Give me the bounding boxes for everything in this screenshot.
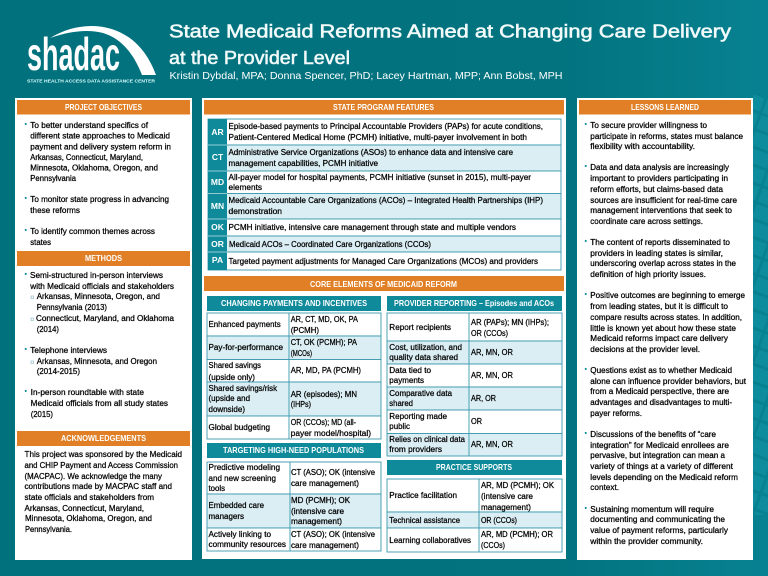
table: changing payments: (PCMH) bbox=[291, 326, 319, 335]
table: provider reporting: quality data shared bbox=[389, 353, 458, 362]
text block: methods: • bbox=[24, 272, 28, 278]
table: provider reporting: OR (CCOs) bbox=[471, 329, 508, 338]
text block: lessons: providers in leading states is similar, bbox=[590, 249, 723, 258]
text block: methods: Arkansas, Minnesota, and Oregon bbox=[37, 357, 157, 366]
table: provider reporting: AR, OR bbox=[471, 394, 496, 403]
text block: lessons: • bbox=[584, 164, 588, 170]
table: state program features: management capabilities, PCMH initiative bbox=[228, 159, 379, 168]
table: provider reporting: payments bbox=[389, 376, 424, 385]
heading: core elements: CORE ELEMENTS OF MEDICAID REFORM bbox=[310, 279, 457, 289]
table: state program features: PCMH initiative, intensive care management through state and multiple vendors bbox=[228, 223, 516, 232]
table: state program features: AR bbox=[211, 127, 224, 137]
text block: lessons: payer reforms. bbox=[590, 409, 642, 418]
heading: lessons learned: LESSONS LEARNED bbox=[631, 102, 699, 112]
text block: lessons: Questions exist as to whether Medicaid bbox=[590, 366, 732, 375]
text block: methods: • bbox=[24, 388, 28, 396]
table: targeting high-need populations: Actively linking to bbox=[208, 530, 272, 539]
text block: acknowledgements: and CHIP Payment and Access Commission bbox=[24, 461, 178, 470]
text block: lessons: underscoring overlap across states in the bbox=[590, 259, 737, 268]
table: targeting high-need populations: management) bbox=[291, 517, 342, 526]
table: provider reporting bbox=[387, 313, 562, 456]
logo: shadac: shadac bbox=[27, 28, 120, 80]
table: provider reporting: Relies on clinical data bbox=[389, 435, 466, 444]
table: changing payments: payer model/hospital) bbox=[291, 429, 371, 438]
subheading: practice supports bbox=[387, 460, 562, 475]
table: provider reporting: Comparative data bbox=[389, 389, 453, 398]
table: state program features: Patient-Centered Medical Home (PCMH) initiative, multi-payer involvement in both bbox=[228, 133, 527, 142]
text block: methods: Pennsylvania (2013) bbox=[37, 303, 107, 312]
text block: methods: Connecticut, Maryland, and Oklahoma bbox=[36, 314, 175, 323]
text block: lessons: • bbox=[584, 292, 588, 298]
text block: objectives: states bbox=[30, 238, 51, 247]
table: practice supports bbox=[387, 479, 562, 552]
text block: lessons: • bbox=[584, 506, 588, 512]
table: targeting high-need populations: MD (PCMH); OK bbox=[291, 496, 351, 505]
text block: methods: (2014-2015) bbox=[37, 367, 80, 376]
text block: lessons: value of payment reforms, particularly bbox=[590, 526, 728, 535]
text block: lessons: flexibility with accountability. bbox=[590, 142, 695, 151]
table: targeting high-need populations bbox=[207, 462, 381, 551]
text block: acknowledgements: (MACPAC). We acknowledge the many bbox=[24, 472, 162, 481]
table: changing payments: downside) bbox=[208, 405, 245, 414]
table: changing payments: (MCOs) bbox=[291, 349, 312, 358]
text block: methods: Arkansas, Minnesota, Oregon, and bbox=[37, 292, 160, 301]
text block: lessons: Sustaining momentum will require bbox=[590, 505, 715, 514]
title: at the Provider Level bbox=[169, 47, 350, 68]
text block: acknowledgements: Arkansas, Connecticut, Maryland, bbox=[24, 504, 144, 513]
text block: acknowledgements: state officials and stakeholders from bbox=[24, 493, 154, 502]
table: state program features: Administrative Service Organizations (ASOs) to enhance data and intensive care bbox=[228, 148, 514, 157]
table: changing payments: Pay-for-performance bbox=[208, 343, 284, 352]
table: state program features: PA bbox=[212, 255, 223, 265]
table: provider reporting: from providers bbox=[389, 445, 442, 454]
table: changing payments: AR, MD, PA (PCMH) bbox=[291, 366, 361, 375]
heading: methods: METHODS bbox=[85, 253, 122, 263]
text block: objectives: Minnesota, Oklahoma, Oregon, and bbox=[30, 164, 158, 172]
text block: methods: (2015) bbox=[31, 410, 53, 419]
table: provider reporting: AR (PAPs); MN (IHPs); bbox=[471, 318, 549, 327]
text block: lessons: coordinate care across settings. bbox=[590, 217, 703, 226]
subheading: provider reporting: PROVIDER REPORTING – Episodes and ACOs bbox=[394, 298, 554, 308]
table: targeting high-need populations: Predictive modeling bbox=[208, 463, 280, 472]
table: targeting high-need populations: tools bbox=[208, 484, 225, 493]
table: state program features bbox=[208, 119, 561, 270]
table: targeting high-need populations: and new screening bbox=[208, 474, 276, 483]
text block: lessons: from a Medicaid perspective, there are bbox=[590, 387, 730, 396]
table: changing payments: OR (CCOs); MD (all- bbox=[291, 418, 356, 427]
text block: lessons: context. bbox=[590, 483, 619, 492]
text block: lessons: pervasive, but integration can mean a bbox=[590, 451, 726, 460]
table: changing payments bbox=[207, 313, 381, 439]
text block: methods: In-person roundtable with state bbox=[31, 388, 145, 397]
text block: lessons: little is known yet about how these state bbox=[590, 324, 737, 333]
table: provider reporting: AR, MN, OR bbox=[471, 371, 513, 380]
heading: project objectives: PROJECT OBJECTIVES bbox=[65, 102, 142, 112]
table: changing payments: Shared savings/risk bbox=[208, 384, 278, 393]
table: targeting high-need populations: managers bbox=[208, 512, 244, 521]
heading: acknowledgements bbox=[17, 431, 190, 446]
text block: lessons: The content of reports disseminated to bbox=[590, 238, 731, 247]
header band bbox=[27, 20, 732, 84]
text block: lessons: integration” for Medicaid enrollees are bbox=[590, 441, 730, 450]
title bbox=[169, 20, 732, 68]
panel: center column bbox=[202, 98, 566, 559]
text block: objectives: different state approaches to Medicaid bbox=[30, 132, 170, 141]
table: changing payments: (upside and bbox=[208, 394, 250, 403]
table: practice supports: management) bbox=[481, 503, 531, 512]
text block: lessons: To secure provider willingness to bbox=[590, 121, 708, 130]
text block: lessons: documenting and communicating the bbox=[590, 515, 726, 524]
text block: acknowledgements: contributions made by MACPAC staff and bbox=[24, 482, 172, 491]
table: targeting high-need populations: community resources bbox=[208, 540, 286, 549]
text block: objectives: these reforms bbox=[30, 206, 80, 215]
text block: lessons: • bbox=[584, 238, 588, 246]
text block: methods: Telephone interviews bbox=[30, 346, 107, 355]
table: practice supports: Technical assistance bbox=[389, 516, 461, 525]
table: state program features: Medicaid ACOs – Coordinated Care Organizations (CCOs) bbox=[229, 240, 431, 249]
table: provider reporting: Reporting made bbox=[389, 412, 448, 421]
table: changing payments: CT, OK (PCMH); PA bbox=[291, 338, 358, 347]
table: practice supports: Practice facilitation bbox=[389, 491, 457, 500]
text block: lessons: compare results across states. In addition, bbox=[590, 313, 742, 322]
text block: lessons: alone can influence provider behaviors, but bbox=[590, 377, 747, 386]
table: targeting high-need populations: CT (ASO); OK (intensive bbox=[291, 530, 376, 539]
panel: left column bbox=[15, 98, 192, 560]
heading: core elements bbox=[204, 276, 564, 291]
text block: lessons: sources are insufficient for real-time care bbox=[590, 196, 738, 205]
table: practice supports: Learning collaboratives bbox=[389, 536, 471, 545]
table: state program features: Episode-based payments to Principal Accountable Providers (PAPs) for acute conditions, bbox=[228, 122, 543, 131]
heading: lessons learned bbox=[579, 100, 751, 114]
text block: lessons: levels depending on the Medicaid reform bbox=[590, 473, 738, 482]
table: changing payments: AR (episodes); MN bbox=[291, 390, 357, 399]
table: state program features: Targeted payment adjustments for Managed Care Organizations (MCOs) and providers bbox=[228, 257, 538, 266]
text block: lessons: • bbox=[584, 122, 588, 128]
table: provider reporting: OR bbox=[471, 417, 482, 426]
table: targeting high-need populations: CT (ASO); OK (intensive bbox=[291, 468, 376, 477]
text block: lessons: • bbox=[584, 366, 588, 374]
table: state program features: All-payer model for hospital payments, PCMH initiative (sunset in 2015), multi-payer bbox=[228, 173, 531, 182]
text block: lessons: • bbox=[584, 430, 588, 438]
table: targeting high-need populations: (intensive care bbox=[291, 507, 345, 516]
subheading: targeting high-need populations: TARGETING HIGH-NEED POPULATIONS bbox=[223, 445, 364, 455]
table: provider reporting: AR, MN, OR bbox=[471, 440, 513, 449]
text block: acknowledgements bbox=[24, 450, 182, 534]
table: practice supports: AR, MD (PCMH); OK bbox=[481, 481, 555, 490]
table: provider reporting: AR, MN, OR bbox=[471, 348, 513, 357]
subheading: practice supports: PRACTICE SUPPORTS bbox=[436, 462, 512, 472]
subheading: provider reporting bbox=[387, 296, 562, 311]
table: state program features: Medicaid Accountable Care Organizations (ACOs) – Integrated Health Partnerships (IHP) bbox=[228, 196, 543, 205]
table: practice supports: (CCOs) bbox=[481, 541, 505, 550]
heading: state program features bbox=[204, 100, 564, 114]
table: practice supports: (intensive care bbox=[481, 492, 534, 501]
text block: lessons: management interventions that seek to bbox=[590, 206, 733, 215]
subheading: changing payments bbox=[207, 296, 381, 311]
text block: objectives: payment and delivery system reform in bbox=[30, 142, 171, 151]
heading: state program features: STATE PROGRAM FEATURES bbox=[333, 102, 434, 112]
text block: lessons: advantages and disadvantages to multi- bbox=[590, 398, 732, 407]
text block: methods bbox=[24, 271, 175, 419]
heading: project objectives bbox=[17, 100, 190, 114]
text block: lessons: Positive outcomes are beginning to emerge bbox=[590, 291, 746, 300]
table: changing payments: (upside only) bbox=[208, 373, 255, 382]
text block: lessons: variety of things at a variety of different bbox=[590, 462, 734, 471]
table: state program features: OR bbox=[211, 239, 224, 249]
heading: methods bbox=[17, 251, 190, 266]
text block: lessons: Medicaid reforms impact care delivery bbox=[590, 334, 728, 343]
heading: acknowledgements: ACKNOWLEDGEMENTS bbox=[61, 433, 146, 443]
text block: objectives: • bbox=[24, 196, 28, 202]
text block: lessons: from leading states, but it is difficult to bbox=[590, 302, 729, 311]
table: changing payments: Global budgeting bbox=[208, 423, 270, 432]
text block: acknowledgements: This project was sponsored by the Medicaid bbox=[24, 450, 182, 459]
text block: lessons: reform efforts, but claims-based data bbox=[590, 185, 724, 194]
table: provider reporting: public bbox=[389, 422, 410, 431]
text block: objectives bbox=[24, 121, 171, 247]
text block: lessons: important to providers participating in bbox=[590, 174, 728, 183]
text block: lessons: Data and data analysis are increasingly bbox=[590, 163, 729, 172]
table: changing payments: Enhanced payments bbox=[208, 320, 281, 329]
text block: objectives: To better understand specifics of bbox=[30, 121, 149, 130]
table: changing payments: (IHPs) bbox=[291, 400, 311, 409]
table: state program features: MN bbox=[211, 201, 224, 211]
table: state program features: demonstration bbox=[228, 207, 282, 216]
subheading: changing payments: CHANGING PAYMENTS AND INCENTIVES bbox=[221, 298, 367, 308]
table: changing payments: AR, CT, MD, OK, PA bbox=[291, 315, 359, 324]
table: provider reporting: shared bbox=[389, 399, 413, 408]
text block: acknowledgements: Minnesota, Oklahoma, Oregon, and bbox=[25, 514, 152, 523]
text block: lessons: definition of high priority issues. bbox=[590, 270, 706, 279]
text block: objectives: • bbox=[24, 122, 28, 128]
text block: methods: Medicaid officials from all study states bbox=[31, 399, 168, 408]
text block: acknowledgements: Pennsylvania. bbox=[25, 525, 72, 534]
table: changing payments: Shared savings bbox=[208, 361, 261, 370]
authors: Kristin Dybdal, MPA; Donna Spencer, PhD; Lacey Hartman, MPP; Ann Bobst, MPH bbox=[170, 70, 562, 82]
panel: lessons learned bbox=[577, 98, 753, 560]
text block: lessons: decisions at the provider level. bbox=[590, 345, 700, 354]
text block: objectives: Pennsylvania bbox=[30, 174, 77, 183]
table: targeting high-need populations: care management) bbox=[291, 541, 359, 550]
text block: objectives: Arkansas, Connecticut, Maryland, bbox=[30, 153, 143, 162]
text block: methods: • bbox=[24, 346, 28, 354]
text block: lessons: Discussions of the benefits of “care bbox=[590, 430, 717, 439]
table: state program features: MD bbox=[211, 177, 224, 187]
text block: objectives: • bbox=[24, 228, 28, 234]
text block: objectives: To identify common themes across bbox=[30, 227, 155, 236]
table: state program features: elements bbox=[228, 183, 262, 192]
table: provider reporting: Cost, utilization, and bbox=[389, 343, 462, 352]
text block: objectives: To monitor state progress in advancing bbox=[30, 195, 169, 204]
text block: methods: (2014) bbox=[37, 325, 59, 334]
text block: methods: with Medicaid officials and stakeholders bbox=[29, 282, 174, 291]
text block: lessons: within the provider community. bbox=[589, 537, 703, 546]
table: state program features: OK bbox=[211, 222, 225, 232]
table: targeting high-need populations: Embedded care bbox=[208, 501, 265, 510]
subheading: targeting high-need populations bbox=[207, 443, 381, 458]
text block: lessons: participate in reforms, states must balance bbox=[590, 132, 744, 141]
table: targeting high-need populations: care management) bbox=[291, 479, 359, 488]
table: practice supports: OR (CCOs) bbox=[481, 516, 517, 525]
table: state program features: CT bbox=[212, 152, 224, 162]
table: provider reporting: Report recipients bbox=[389, 323, 451, 332]
logo: shadac: STATE HEALTH ACCESS DATA ASSISTANCE CENTER bbox=[27, 78, 156, 84]
text block: methods: Semi-structured in-person interviews bbox=[30, 271, 163, 280]
title: State Medicaid Reforms Aimed at Changing Care Delivery bbox=[169, 20, 732, 42]
text block: lessons bbox=[584, 121, 747, 546]
table: practice supports: AR, MD (PCMH); OR bbox=[481, 530, 553, 539]
table: provider reporting: Data tied to bbox=[389, 366, 432, 375]
